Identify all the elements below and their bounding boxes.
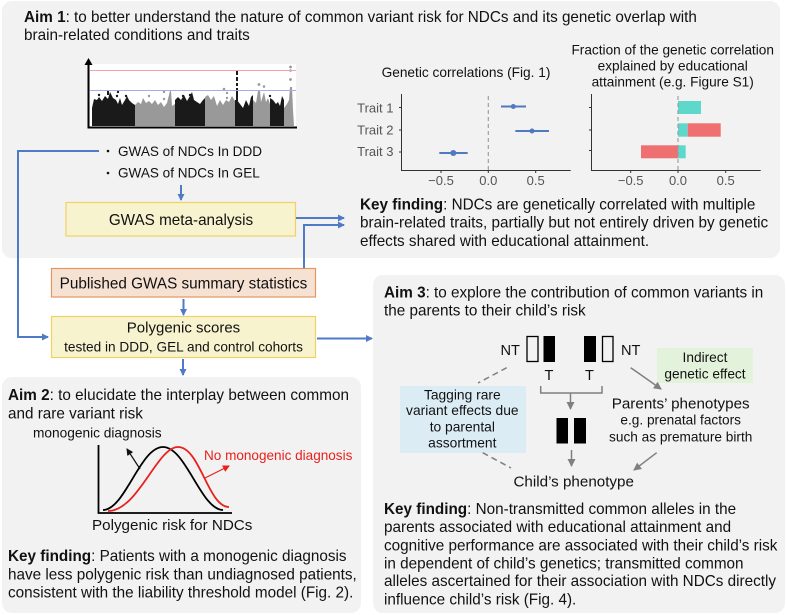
box: Polygenic scores: Polygenic scores [127, 320, 240, 337]
key finding: Aim 3: influence child’s risk (Fig. 4). [384, 591, 576, 608]
box: GWAS meta-analysis: GWAS meta-analysis [109, 212, 254, 229]
key finding: Aim 3: alleles ascertained for their association with NDCs directly [384, 573, 776, 590]
chart: genetic correlations: −0.5 [428, 173, 454, 188]
heading: Aim 3 [384, 285, 763, 320]
box: Polygenic scores: tested in DDD, GEL and control cohorts [64, 340, 303, 355]
key finding: Aim 3: cognitive performance are associated with their child’s risk [384, 537, 778, 554]
key finding: Aim 3: in dependent of child’s genetics; transmitted common [384, 555, 744, 572]
key finding: Aim 1: Key finding: NDCs are genetically correlated with multiple [360, 196, 755, 214]
diagram: parental alleles and child's phenotype: e.g. prenatal factors [620, 412, 741, 427]
heading: Aim 1 [24, 9, 697, 44]
diagram: parental alleles and child's phenotype: Child’s phenotype [513, 474, 634, 491]
chart: fraction explained by educational attainment: Fraction of the genetic correlation [571, 42, 774, 58]
box: tagging rare variant effects: assortment [428, 436, 497, 451]
chart: polygenic risk distributions: No monogenic diagnosis [204, 448, 353, 463]
heading: Aim 2 [8, 387, 349, 422]
chart: polygenic risk distributions [33, 426, 353, 534]
chart: genetic correlations: 0.0 [479, 173, 497, 188]
chart: genetic correlations: Trait 1 [357, 100, 394, 116]
heading: Aim 3: Aim 3: to explore the contribution of common variants in [384, 285, 763, 302]
text: GWAS cohorts list [107, 144, 262, 181]
chart: fraction explained by educational attainment: attainment (e.g. Figure S1) [592, 75, 754, 90]
box: tagging rare variant effects: to parental [430, 420, 495, 435]
heading: Aim 3: the parents to their child’s risk [384, 302, 586, 320]
chart: genetic correlations: Trait 2 [357, 122, 394, 138]
key finding: Aim 2: Key finding: Patients with a monogenic diagnosis [8, 548, 347, 565]
heading: Aim 1: brain-related conditions and traits [24, 27, 250, 44]
key finding: Aim 1: brain-related traits, partially but not entirely driven by genetic [360, 215, 769, 232]
heading: Aim 2: and rare variant risk [8, 405, 143, 422]
key finding: Aim 2 [8, 548, 357, 602]
box: Published GWAS summary statistics: Published GWAS summary statistics [60, 275, 308, 292]
key finding: Aim 3: parents associated with educational attainment and [384, 519, 731, 536]
box: Polygenic scores [52, 316, 316, 358]
diagram: parental alleles and child's phenotype: NT [500, 343, 520, 359]
key finding: Aim 1 [360, 196, 769, 250]
box: tagging rare variant effects: variant effects due [406, 403, 519, 418]
box: indirect genetic effect: Indirect [683, 350, 728, 365]
box: tagging rare variant effects: Tagging rare [424, 387, 501, 402]
text: GWAS cohorts list: GWAS of NDCs In DDD [118, 144, 262, 159]
key finding: Aim 3 [384, 501, 778, 608]
box: Published GWAS summary statistics [52, 268, 316, 297]
key finding: Aim 3: Key finding: Non-transmitted common alleles in the [384, 501, 736, 518]
box: GWAS meta-analysis [66, 202, 296, 236]
chart: fraction explained by educational attainment [571, 42, 774, 188]
trait 3 estimate [439, 150, 468, 156]
diagram: parental alleles and child's phenotype: T [585, 368, 594, 384]
diagram: parental alleles and child's phenotype: such as premature birth [609, 430, 752, 445]
chart: polygenic risk distributions: monogenic diagnosis [33, 426, 162, 441]
panel: Aim 1 [2, 1, 780, 258]
diagram: parental alleles and child's phenotype [400, 336, 753, 491]
chart: fraction explained by educational attainment: explained by educational [598, 59, 748, 74]
panel: Aim 2 [2, 377, 361, 613]
box: indirect genetic effect [657, 348, 753, 383]
chart: genetic correlations: 0.5 [527, 173, 545, 188]
chart: genetic correlations: Genetic correlations (Fig. 1) [382, 65, 550, 80]
diagram: parental alleles and child's phenotype: NT [621, 343, 641, 359]
heading: Aim 2: Aim 2: to elucidate the interplay between common [8, 387, 349, 404]
chart: genetic correlations: Trait 3 [357, 144, 394, 159]
chart: fraction explained by educational attainment: 0.5 [717, 173, 735, 188]
box: tagging rare variant effects [400, 386, 526, 453]
trait 1 estimate [501, 104, 526, 109]
chart: Manhattan plot [84, 58, 297, 128]
key finding: Aim 2: have less polygenic risk than undiagnosed patients, [8, 566, 357, 583]
chart: genetic correlations [357, 65, 571, 188]
chart: polygenic risk distributions: Polygenic risk for NDCs [92, 517, 253, 534]
key finding: Aim 1: effects shared with educational attainment. [360, 233, 649, 250]
chart: fraction explained by educational attainment: 0.0 [669, 173, 687, 188]
trait 2 estimate [515, 128, 549, 134]
chart: fraction explained by educational attainment: −0.5 [618, 173, 644, 188]
panel: Aim 3 [373, 275, 785, 613]
box: indirect genetic effect: genetic effect [664, 366, 746, 381]
arrows: flowchart connections [18, 151, 372, 375]
text: GWAS cohorts list: GWAS of NDCs In GEL [118, 166, 260, 181]
diagram: parental alleles and child's phenotype: T [545, 368, 554, 384]
key finding: Aim 2: consistent with the liability threshold model (Fig. 2). [8, 585, 353, 602]
diagram: parental alleles and child's phenotype: Parents’ phenotypes [612, 395, 750, 412]
heading: Aim 1: Aim 1: to better understand the nature of common variant risk for NDCs and its genetic overlap with [24, 9, 697, 26]
